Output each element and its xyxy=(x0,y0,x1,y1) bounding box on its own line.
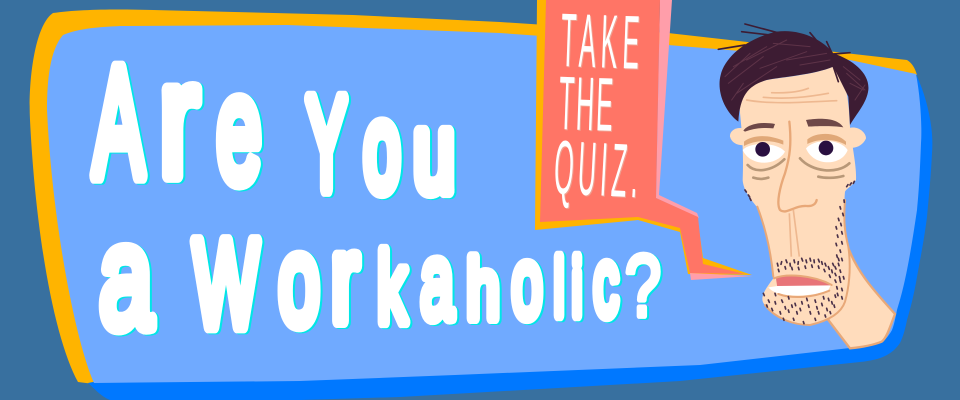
title line 2: a Workaholic?: k xyxy=(377,233,407,344)
title line 2: a Workaholic?: l xyxy=(554,243,564,332)
nose xyxy=(778,122,817,211)
title line 2: a Workaholic?: r xyxy=(331,212,359,348)
head xyxy=(739,67,856,325)
forehead wrinkles xyxy=(747,88,837,103)
title line 1: Are You: A xyxy=(93,36,144,209)
title line 2: a Workaholic?: o xyxy=(512,228,542,338)
speech bubble xyxy=(535,0,753,280)
title line 1: Are You xyxy=(93,30,454,217)
bubble text: take the quiz: QUIZ. xyxy=(552,125,645,214)
illustration: tired man's face xyxy=(718,24,895,348)
title line 2: a Workaholic?: o xyxy=(279,212,319,351)
title line 1: Are You: r xyxy=(159,30,199,211)
title line 1: Are You: u xyxy=(414,90,454,214)
philtrum lines xyxy=(789,210,799,257)
jaw outline xyxy=(757,200,850,325)
eyes xyxy=(743,141,848,163)
title line 2: a Workaholic?: a xyxy=(420,222,454,341)
neck xyxy=(828,243,895,348)
title line 2: a Workaholic?: i xyxy=(572,243,582,332)
title line 2: a Workaholic?: c xyxy=(594,230,618,336)
ears xyxy=(730,127,866,148)
title line 2: a Workaholic? xyxy=(99,197,661,359)
bubble text: take the quiz: TAKE xyxy=(559,0,646,85)
eyebrows xyxy=(743,119,843,132)
bubble text: take the quiz: THE xyxy=(557,61,616,147)
eyelids xyxy=(744,134,846,146)
title line 2: a Workaholic?: ? xyxy=(625,238,661,335)
panel: blue bottom-right border xyxy=(88,74,932,400)
title line 1: Are You: e xyxy=(217,46,261,213)
title line 1: Are You: Y xyxy=(306,72,347,217)
title line 2: a Workaholic?: a xyxy=(99,197,153,359)
title line 1: Are You: o xyxy=(364,80,400,216)
stubble xyxy=(745,181,854,324)
eye bags xyxy=(748,158,849,179)
hair xyxy=(718,24,868,125)
title line 2: a Workaholic?: W xyxy=(193,216,259,353)
mouth xyxy=(768,276,832,297)
title line 2: a Workaholic?: h xyxy=(467,243,499,337)
bubble text: take the quiz xyxy=(552,0,646,214)
